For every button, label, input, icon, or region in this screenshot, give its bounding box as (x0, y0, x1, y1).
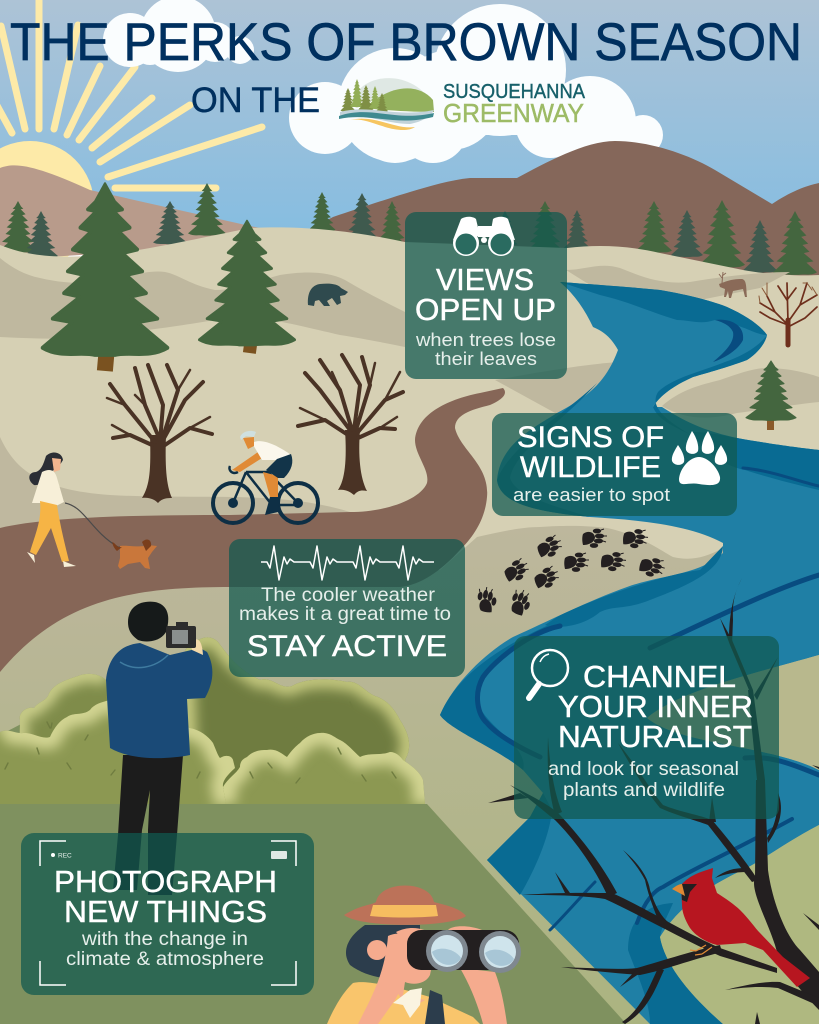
tree: bare tree left (107, 365, 212, 503)
mountain: far right (305, 141, 819, 300)
branches (488, 578, 819, 1024)
text: with the change in climate and atmosphere (66, 928, 264, 970)
heading: signs of wildlife: SIGNS OF (517, 421, 664, 454)
text: the cooler weather: The cooler weather (261, 584, 436, 606)
foreground: green behind bushes (0, 722, 60, 810)
icon: cyclist (213, 431, 318, 523)
land: green lower right bank (660, 825, 819, 1024)
text: when trees lose their leaves: when trees lose (415, 329, 556, 350)
land: khaki bank near river bend (495, 362, 618, 414)
tree: small bare red tree (759, 283, 817, 345)
land: khaki patch by path (0, 437, 350, 530)
panel: channel your inner naturalist (514, 636, 779, 819)
heading: signs of wildlife (517, 421, 664, 484)
heading: views open up: VIEWS (436, 262, 534, 297)
heading: photograph new things (54, 864, 277, 929)
bushes (0, 637, 425, 804)
subtitle: ON THE (191, 81, 320, 120)
heading: channel your inner naturalist (558, 659, 753, 754)
heading: channel your inner naturalist: CHANNEL (583, 659, 736, 694)
icon: cardinal (672, 868, 810, 987)
icon: woman walking (27, 453, 140, 567)
river: main channel (440, 282, 819, 1024)
icon: sun and rays (0, 0, 262, 269)
trees: far ridge (0, 183, 817, 275)
land: lower meadow (0, 526, 819, 1024)
text: and look for seasonal plants and wildlife: plants and wildlife (563, 779, 725, 801)
figure: photographer (106, 602, 212, 895)
panel: signs of wildlife (492, 413, 737, 516)
icon: paw print (672, 431, 727, 485)
icon: elk (719, 272, 747, 298)
tree: large fir left (42, 184, 168, 372)
icon: magnifying glass (529, 650, 568, 698)
text: when trees lose their leaves (415, 329, 556, 369)
cloud: behind title (103, 0, 254, 72)
logo wordmark: SUSQUEHANNA (443, 81, 586, 103)
panel: stay active (229, 539, 465, 677)
tree: second fir (199, 221, 295, 354)
cloud: logo (289, 4, 663, 168)
icon: viewfinder frame: REC (58, 852, 72, 860)
text: are easier to spot: are easier to spot (513, 485, 670, 505)
background: sky (0, 0, 819, 240)
icon: binoculars (453, 217, 515, 256)
text: the cooler weather: makes it a great time to (239, 603, 451, 625)
heading: signs of wildlife: WILDLIFE (520, 451, 661, 484)
panel: views open up (405, 212, 567, 379)
land: khaki meadow bend right (647, 655, 819, 770)
figure: person with binoculars (327, 886, 521, 1024)
text: and look for seasonal plants and wildlife (548, 758, 739, 801)
heading: channel your inner naturalist: YOUR INNER (558, 689, 753, 724)
text: with the change in climate and atmosphere: with the change in (81, 928, 248, 950)
tree: right fir (746, 361, 796, 430)
text: with the change in climate and atmosphere: climate & atmosphere (66, 948, 264, 970)
panel: photograph new things (21, 833, 314, 995)
heading: photograph new things: PHOTOGRAPH (54, 864, 277, 899)
icon: dog (112, 539, 157, 569)
text: the cooler weather (239, 584, 451, 625)
heading: channel your inner naturalist: NATURALIST (558, 719, 752, 754)
heading: photograph new things: NEW THINGS (64, 894, 267, 929)
river: deep current streams (477, 320, 819, 930)
text: when trees lose their leaves: their leaves (435, 348, 537, 369)
heading: views open up: OPEN UP (415, 292, 556, 327)
logo: Susquehanna Greenway (339, 78, 434, 130)
tree: bare tree right (298, 355, 403, 495)
heading: views open up (415, 262, 556, 327)
icon: heartbeat line (261, 546, 434, 580)
land: khaki hill band left (0, 258, 405, 347)
logo wordmark: GREENWAY (443, 98, 584, 128)
paw prints (475, 528, 667, 618)
icon: viewfinder frame (40, 841, 296, 985)
icon: bear (308, 284, 348, 306)
text: and look for seasonal plants and wildlife: and look for seasonal (548, 758, 739, 780)
foreground: green overlook (0, 804, 650, 1024)
trail: brown path (0, 388, 505, 672)
heading: stay active: STAY ACTIVE (247, 630, 447, 663)
land: peninsula with right tree (662, 368, 819, 418)
river: darker shallows (440, 282, 819, 1024)
land: main sand hills (0, 227, 819, 1024)
logo wordmark (443, 81, 586, 128)
mountain: far left (0, 165, 320, 260)
land: khaki hill band upper right (566, 266, 790, 300)
